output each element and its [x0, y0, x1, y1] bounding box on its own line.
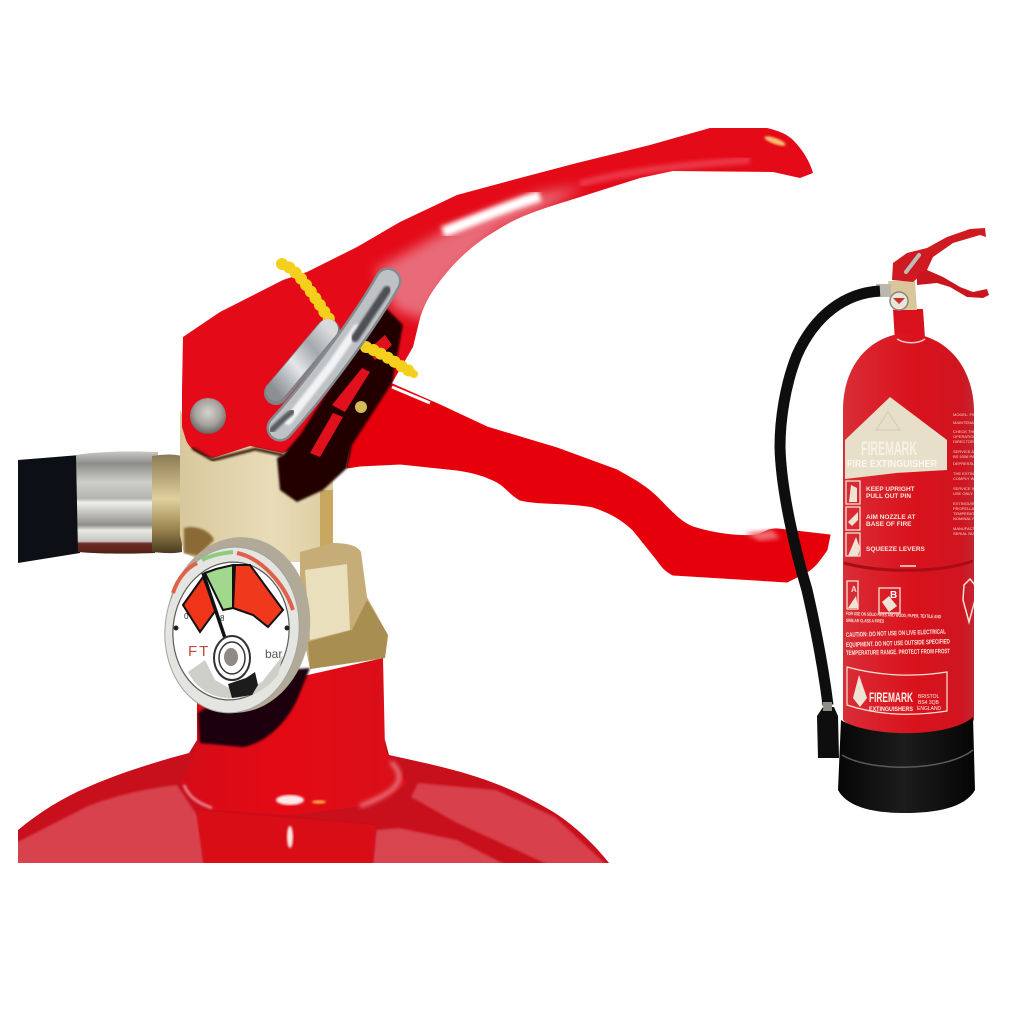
caution text: TEMPERATURE RANGE. PROTECT FROM FROST: [846, 648, 950, 657]
hose ferrule: [76, 451, 182, 554]
green zone: [205, 565, 233, 610]
gauge scale marks: 8: [220, 614, 225, 623]
instruction 1: PULL OUT PIN: [866, 493, 911, 500]
caution text: [846, 629, 950, 657]
pin ring: [280, 281, 388, 428]
address: ENGLAND: [917, 706, 942, 712]
yellow dot: [355, 401, 367, 413]
side small print: EXTINGUISHING AGENT: [953, 501, 1000, 506]
class description: [846, 611, 941, 625]
address: BS4 3QB: [918, 700, 940, 706]
extinguisher body: [843, 333, 974, 734]
instruction 1: [846, 481, 915, 504]
side small print: COMPLY WITH STANDARD: [953, 476, 1004, 481]
gauge needle: [203, 573, 225, 638]
side small print: MANUFACTURED BY: [953, 526, 993, 531]
address: BRISTOL: [918, 694, 940, 700]
panel: close-up of extinguisher head: [10, 128, 830, 870]
instruction 1: KEEP UPRIGHT: [866, 486, 915, 493]
rivet: [190, 398, 226, 434]
fire class pictograms: [847, 581, 900, 613]
Firemark logo box: [847, 667, 947, 714]
brass collar: [888, 281, 917, 310]
gauge hub: [214, 636, 258, 698]
panel: full extinguisher: [780, 228, 1010, 813]
side small print: DEPRESSURISE ANY TIME: [953, 461, 1004, 466]
side small print: BS 5306 PART 3: [953, 454, 984, 459]
side small print: SERVICE AT LEAST ANNUAL: [953, 449, 1008, 454]
instruction list: [846, 481, 926, 556]
gauge glass rim: [157, 540, 307, 720]
side small print: OPERATIONAL CONDITION: [953, 434, 1005, 439]
side small print: MAINTENANCE: SERVICE: [953, 420, 1002, 425]
brass valve body: [180, 410, 388, 669]
tank neck: [181, 658, 407, 815]
side small print: USE ONLY GENUINE PARTS: [953, 491, 1007, 496]
instruction 2: BASE OF FIRE: [866, 521, 912, 528]
caution text: CAUTION: DO NOT USE ON LIVE ELECTRICAL: [846, 629, 946, 639]
mini upper lever: [892, 228, 986, 282]
extinguisher neck: [893, 309, 925, 342]
side small print: [953, 414, 974, 535]
side small print: CHECK THE EXTINGUISHER: [953, 429, 1007, 434]
body ridge highlights: [844, 561, 973, 570]
class description: FOR USE ON SOLID FIRES AND WOOD, PAPER, TEXTILE AND: [846, 611, 941, 620]
class description: SIMILAR CLASS A FIRES: [846, 618, 885, 625]
side small print: SERVICE INFORMATION: [953, 486, 999, 491]
gauge dial face: [166, 556, 296, 706]
address: [917, 694, 942, 712]
gauge housing: [157, 530, 319, 720]
left red zone: [183, 577, 216, 632]
faint triangle logo: [876, 412, 900, 430]
safety ring pin: [272, 281, 388, 430]
brand name: FIREMARK: [861, 439, 917, 460]
flame logo: [853, 675, 867, 707]
class B pictogram: B: [890, 590, 897, 601]
label: cream brand panel: [845, 397, 947, 479]
side small print: PROPELLANT NITROGEN: [953, 506, 1002, 511]
upper lever: [182, 128, 813, 460]
gauge reflection lower: [188, 655, 283, 698]
instruction 2: [846, 507, 915, 530]
logo subtitle: EXTINGUISHERS: [869, 707, 913, 713]
side small print: DIRECTOR OF BASE FIRE: [953, 439, 1003, 444]
side small print: NOMINAL PRESSURE: [953, 516, 995, 521]
mini lower lever: [917, 270, 989, 298]
illustration: fire extinguisher close-up and full view: [18, 128, 989, 863]
lever shadow behind ring pin: [277, 305, 403, 502]
right red zone: [233, 565, 283, 627]
rubber hose: [780, 291, 880, 705]
side ticks: [174, 626, 290, 630]
lever underside shadow: [192, 448, 283, 460]
side small print: TEMPERATURE RANGE: [953, 511, 999, 516]
mini gauge: [890, 292, 908, 310]
gauge unit FT: FT: [188, 643, 210, 660]
red reflections in shadow: [310, 335, 392, 457]
yellow cable tie: [282, 264, 414, 374]
valve and handle: [876, 228, 989, 310]
side small print: THE EXTINGUISHER SHOULD: [953, 471, 1010, 476]
lever pale highlight: [375, 160, 750, 320]
logo name: FIREMARK: [869, 689, 913, 705]
black base: [838, 717, 975, 813]
rim reflections: [173, 552, 293, 610]
hose connector: [876, 284, 891, 297]
gauge scale marks: [184, 612, 225, 623]
product name: FIRE EXTINGUISHER: [847, 459, 938, 470]
gauge unit bar: bar: [265, 647, 282, 661]
lower lever: [347, 383, 830, 582]
pin cylinder: [276, 331, 328, 393]
mini pin: [906, 255, 919, 272]
instruction 2: AIM NOZZLE AT: [866, 514, 915, 521]
tank dome: [10, 740, 618, 870]
lower brass block: [300, 543, 388, 669]
nozzle: [817, 702, 839, 758]
instruction 3: SQUEEZE LEVERS: [866, 546, 926, 553]
side small print: MODEL: FW 6 E: [953, 412, 983, 417]
gauge scale marks: 0: [184, 612, 189, 621]
class A pictogram: A: [851, 585, 857, 594]
caution text: EQUIPMENT. DO NOT USE OUTSIDE SPECIFIED: [846, 638, 950, 649]
gauge shadow: [198, 668, 310, 747]
kitemark: [963, 579, 975, 622]
side small print: SERIAL NUMBER: [953, 531, 986, 536]
pressure gauge: [157, 530, 319, 720]
neck flare highlights: [276, 795, 304, 805]
hose: [18, 455, 80, 563]
